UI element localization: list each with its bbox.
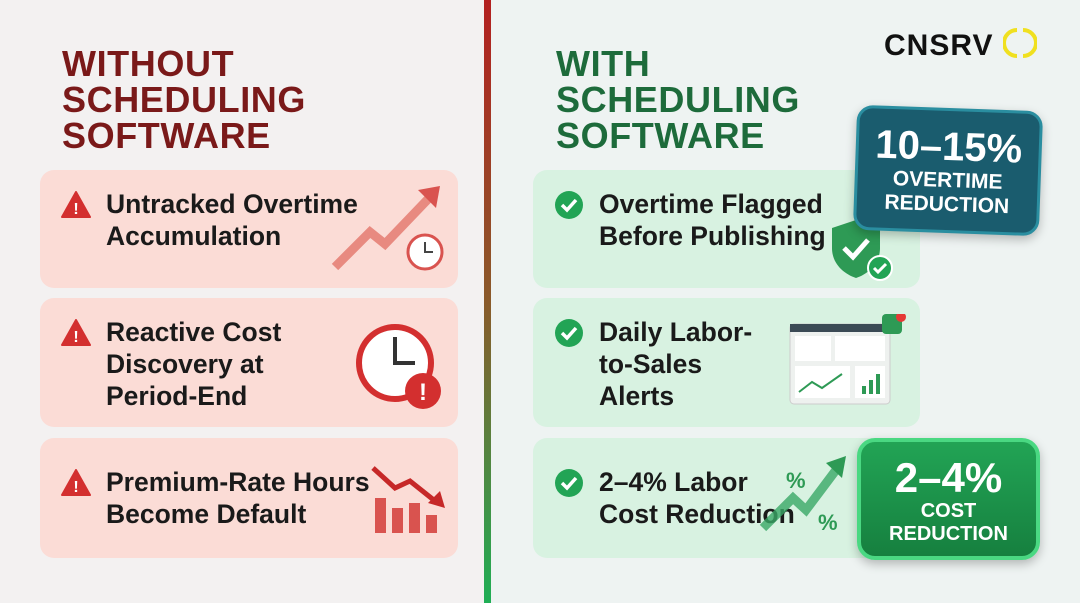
badge: 2-4% cost reduction: [857, 438, 1040, 560]
card: premium-rate: [40, 438, 458, 558]
text: to-Sales: [599, 349, 702, 379]
heading: with: WITH: [556, 43, 650, 84]
icon: warning: [61, 319, 91, 346]
heading: with: [556, 43, 800, 156]
card: 2-4% labor cost: [533, 438, 920, 558]
badge: 10-15% overtime reduction: 10–15%: [875, 122, 1023, 172]
text: Accumulation: [106, 221, 281, 251]
icon: warning: !: [73, 479, 79, 496]
heading: without: SOFTWARE: [62, 115, 271, 156]
icon: falling bars: [371, 466, 445, 533]
text: Premium-Rate Hours: [106, 467, 370, 497]
text: Period-End: [106, 381, 247, 411]
heading: without: [62, 43, 306, 156]
icon: dashboard: [790, 314, 906, 404]
icon: rising arrow clock: [332, 186, 444, 270]
icon: warning: !: [73, 329, 79, 346]
text: Before Publishing: [599, 221, 826, 251]
icon: warning: [61, 469, 91, 496]
text: [106, 189, 358, 251]
card: overtime flagged: [533, 170, 920, 288]
text: Cost Reduction: [599, 499, 795, 529]
text: Overtime Flagged: [599, 189, 823, 219]
icon: arrow percent: %: [818, 510, 838, 535]
badge: 2-4% cost reduction: REDUCTION: [889, 523, 1008, 545]
text: Alerts: [599, 381, 674, 411]
text: [106, 467, 370, 529]
text: Become Default: [106, 499, 306, 529]
text: [599, 467, 795, 529]
text: [106, 317, 281, 411]
text: Discovery at: [106, 349, 264, 379]
heading: without: WITHOUT: [62, 43, 234, 84]
text: Daily Labor-: [599, 317, 752, 347]
logo: CNSRV: [884, 29, 993, 62]
heading: with: SCHEDULING: [556, 79, 800, 120]
icon: clock alert: [356, 324, 441, 409]
logo: [884, 28, 1037, 62]
badge: 2-4% cost reduction: COST: [921, 500, 976, 522]
text: [599, 189, 826, 251]
icon: check: [555, 191, 583, 219]
card: reactive cost: [40, 298, 458, 427]
icon: warning: !: [73, 201, 79, 218]
divider bar: [484, 0, 491, 603]
badge: 10-15% overtime reduction: OVERTIME: [892, 167, 1003, 194]
badge: 10-15% overtime reduction: [853, 105, 1043, 236]
text: Reactive Cost: [106, 317, 281, 347]
card: untracked overtime: [40, 170, 458, 288]
icon: check: [555, 469, 583, 497]
right background: [490, 0, 1080, 603]
badge: 10-15% overtime reduction: REDUCTION: [884, 191, 1010, 218]
heading: without: SCHEDULING: [62, 79, 306, 120]
heading: with: SOFTWARE: [556, 115, 765, 156]
icon: check: [555, 319, 583, 347]
icon: warning: [61, 191, 91, 218]
text: 2–4% Labor: [599, 467, 748, 497]
icon: clock alert: !: [419, 379, 427, 406]
icon: arrow percent: %: [786, 468, 806, 493]
card: daily alerts: [533, 298, 920, 427]
icon: arrow percent: [760, 456, 846, 535]
badge: 2-4% cost reduction: 2–4%: [895, 454, 1002, 501]
icon: shield: [832, 220, 893, 281]
text: Untracked Overtime: [106, 189, 358, 219]
text: [599, 317, 752, 411]
